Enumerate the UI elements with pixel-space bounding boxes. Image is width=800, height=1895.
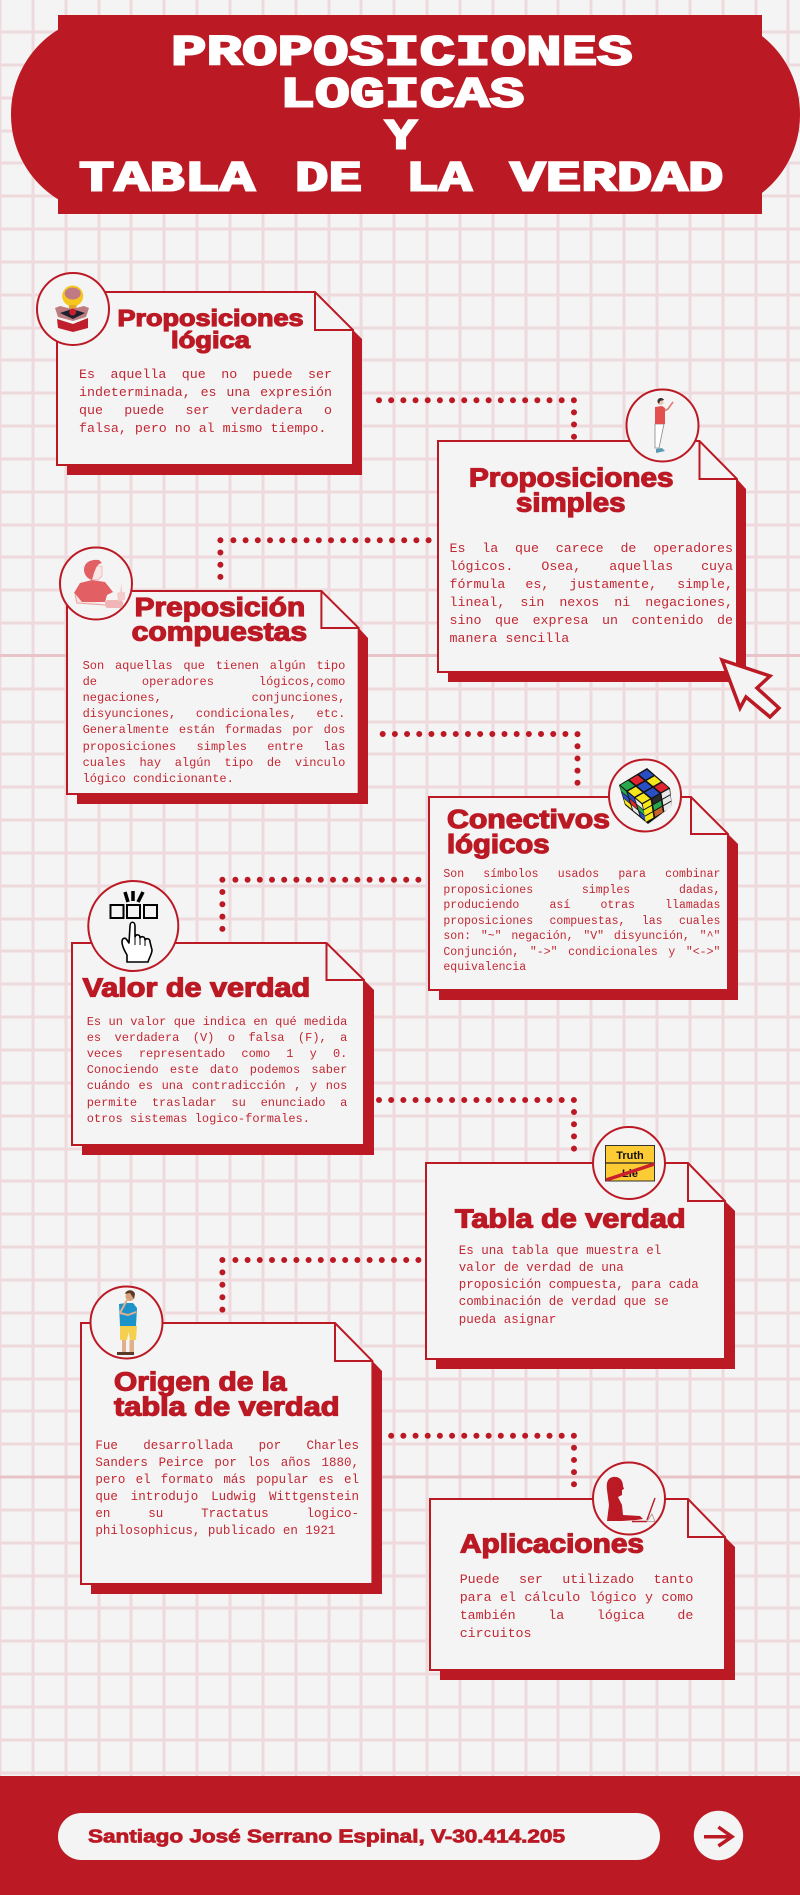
text block [83,658,345,789]
text block: proposiciones simples dadas, [443,884,720,897]
text block: en su Tractatus logico- [95,1507,359,1521]
text block [95,1438,359,1541]
icon: truth lie sign: Truth [616,1150,644,1162]
text block: sino que expresa un contenido de [450,613,733,628]
text block [79,366,332,438]
text block: proposición compuesta, para cada [459,1278,699,1292]
heading: Preposición [135,594,305,622]
heading: Origen de la [114,1369,287,1397]
heading: Valor de verdad [83,975,310,1003]
text block [87,1014,347,1128]
text block: disyunciones, condicionales, etc. [83,707,345,721]
heading: Proposiciones [469,465,674,493]
icon: person at laptop [593,1462,665,1534]
text block: Fue desarrollada por Charles [95,1439,359,1453]
panel: preposición compuestas [60,548,368,804]
text block: Es un valor que indica en qué medida [87,1015,347,1029]
text block: Es la que carece de operadores [450,541,733,556]
text block [459,1243,709,1329]
icon: truth lie sign [593,1127,665,1199]
text block: indeterminada, es una expresión [79,385,332,400]
icon: truth lie sign: Lie [622,1168,638,1180]
icon: rubik cube [609,760,681,832]
text block: para el cálculo lógico y como [460,1590,693,1605]
text block: Puede ser utilizado tanto [460,1572,693,1587]
text block: produciendo así otras llamadas [443,899,720,912]
footer [0,1776,800,1895]
icon: cursor arrow [722,660,779,717]
text block: lógico condicionante. [83,772,234,786]
icon: pointing hand with squares [88,881,178,971]
text block: es verdadera (V) o falsa (F), a [87,1031,347,1045]
heading: Tabla de verdad [455,1206,686,1234]
title: TABLA [79,155,255,204]
text block [450,540,733,648]
title: LOGICAS [280,71,524,120]
heading: compuestas [132,619,307,647]
text block [460,1571,693,1643]
text block: cuales hay algún tipo de vinculo [83,756,345,770]
text block: cuándo es una contradicción , y nos [87,1079,347,1093]
author pill: Santiago José Serrano Espinal, V-30.414.205 [88,1826,565,1847]
heading: simples [516,490,626,518]
title: LA [406,155,472,204]
icon: arrow button [694,1811,743,1860]
text block: Sanders Peirce por los años 1880, [95,1456,359,1470]
icon: person writing [60,548,132,620]
text block: falsa, pero no al mismo tiempo. [79,421,326,436]
dotted connectors [220,400,578,1486]
text block: lógicos. Osea, aquellas cuya [450,559,733,574]
text block: Conjunción, "->" condicionales y "<->" [443,946,720,959]
title: Y [385,112,417,161]
panel: conectivos lógicos [429,760,738,1000]
heading [118,305,304,353]
header banner [11,15,800,214]
icon: lightbulb in box [37,273,109,345]
title: VERDAD [510,155,724,204]
text block: valor de verdad de una [459,1261,624,1275]
heading: tabla de verdad [114,1394,340,1422]
heading [132,594,307,647]
text block: de operadores lógicos,como [83,675,345,689]
text block: que introdujo Ludwig Wittgenstein [95,1490,359,1504]
text block: veces representado como 1 y 0. [87,1047,347,1061]
text block: negaciones, conjunciones, [83,691,345,705]
title: DE [295,155,362,204]
text block: Es una tabla que muestra el [459,1244,661,1258]
text block: Son símbolos usados para combinar [443,868,720,881]
panel: valor de verdad [72,881,374,1155]
text block: otros sistemas logico-formales. [87,1112,310,1126]
panel: origen de la tabla de verdad [81,1286,382,1594]
panel: proposiciones simples [438,390,746,682]
heading [447,806,610,859]
text block: Son aquellas que tienen algún tipo [83,659,345,673]
icon: standing person [626,390,698,462]
heading: Proposiciones [118,305,304,331]
heading: lógica [171,327,250,353]
text block: que puede ser verdadera o [79,403,332,418]
text block: pueda asignar [459,1313,556,1327]
text block: pero el formato más popular es el [95,1473,359,1487]
text block: fórmula es, justamente, simple, [450,577,733,592]
heading [114,1369,340,1422]
text block: proposiciones compuestas, las cuales [443,915,720,928]
text block: permite trasladar su enunciado a [87,1096,347,1110]
text block: proposiciones simples entre las [83,740,345,754]
heading: lógicos [447,831,550,859]
text block: Conociendo este dato podemos saber [87,1063,347,1077]
heading: Conectivos [447,806,610,834]
text block: lineal, sin nexos ni negaciones, [450,595,733,610]
text block: Es aquella que no puede ser [79,367,332,382]
text block: Generalmente están formadas por dos [83,723,345,737]
text block: también la lógica de [460,1608,693,1623]
title [79,28,724,204]
author pill [58,1813,660,1860]
text block: philosophicus, publicado en 1921 [95,1524,335,1538]
heading: Aplicaciones [460,1531,644,1559]
panel: tabla de verdad [426,1127,735,1369]
title: PROPOSICIONES [171,28,633,77]
text block: combinación de verdad que se [459,1295,669,1309]
panel: proposiciones lógica [37,273,362,475]
text block [443,867,720,976]
icon: thinking boy [90,1286,162,1358]
text block: circuitos [460,1626,532,1641]
text block: manera sencilla [450,631,569,646]
text block: equivalencia [443,961,526,974]
text block: son: "~" negación, "V" disyunción, "^" [443,930,720,943]
heading [469,465,674,518]
panel: aplicaciones [430,1462,735,1680]
